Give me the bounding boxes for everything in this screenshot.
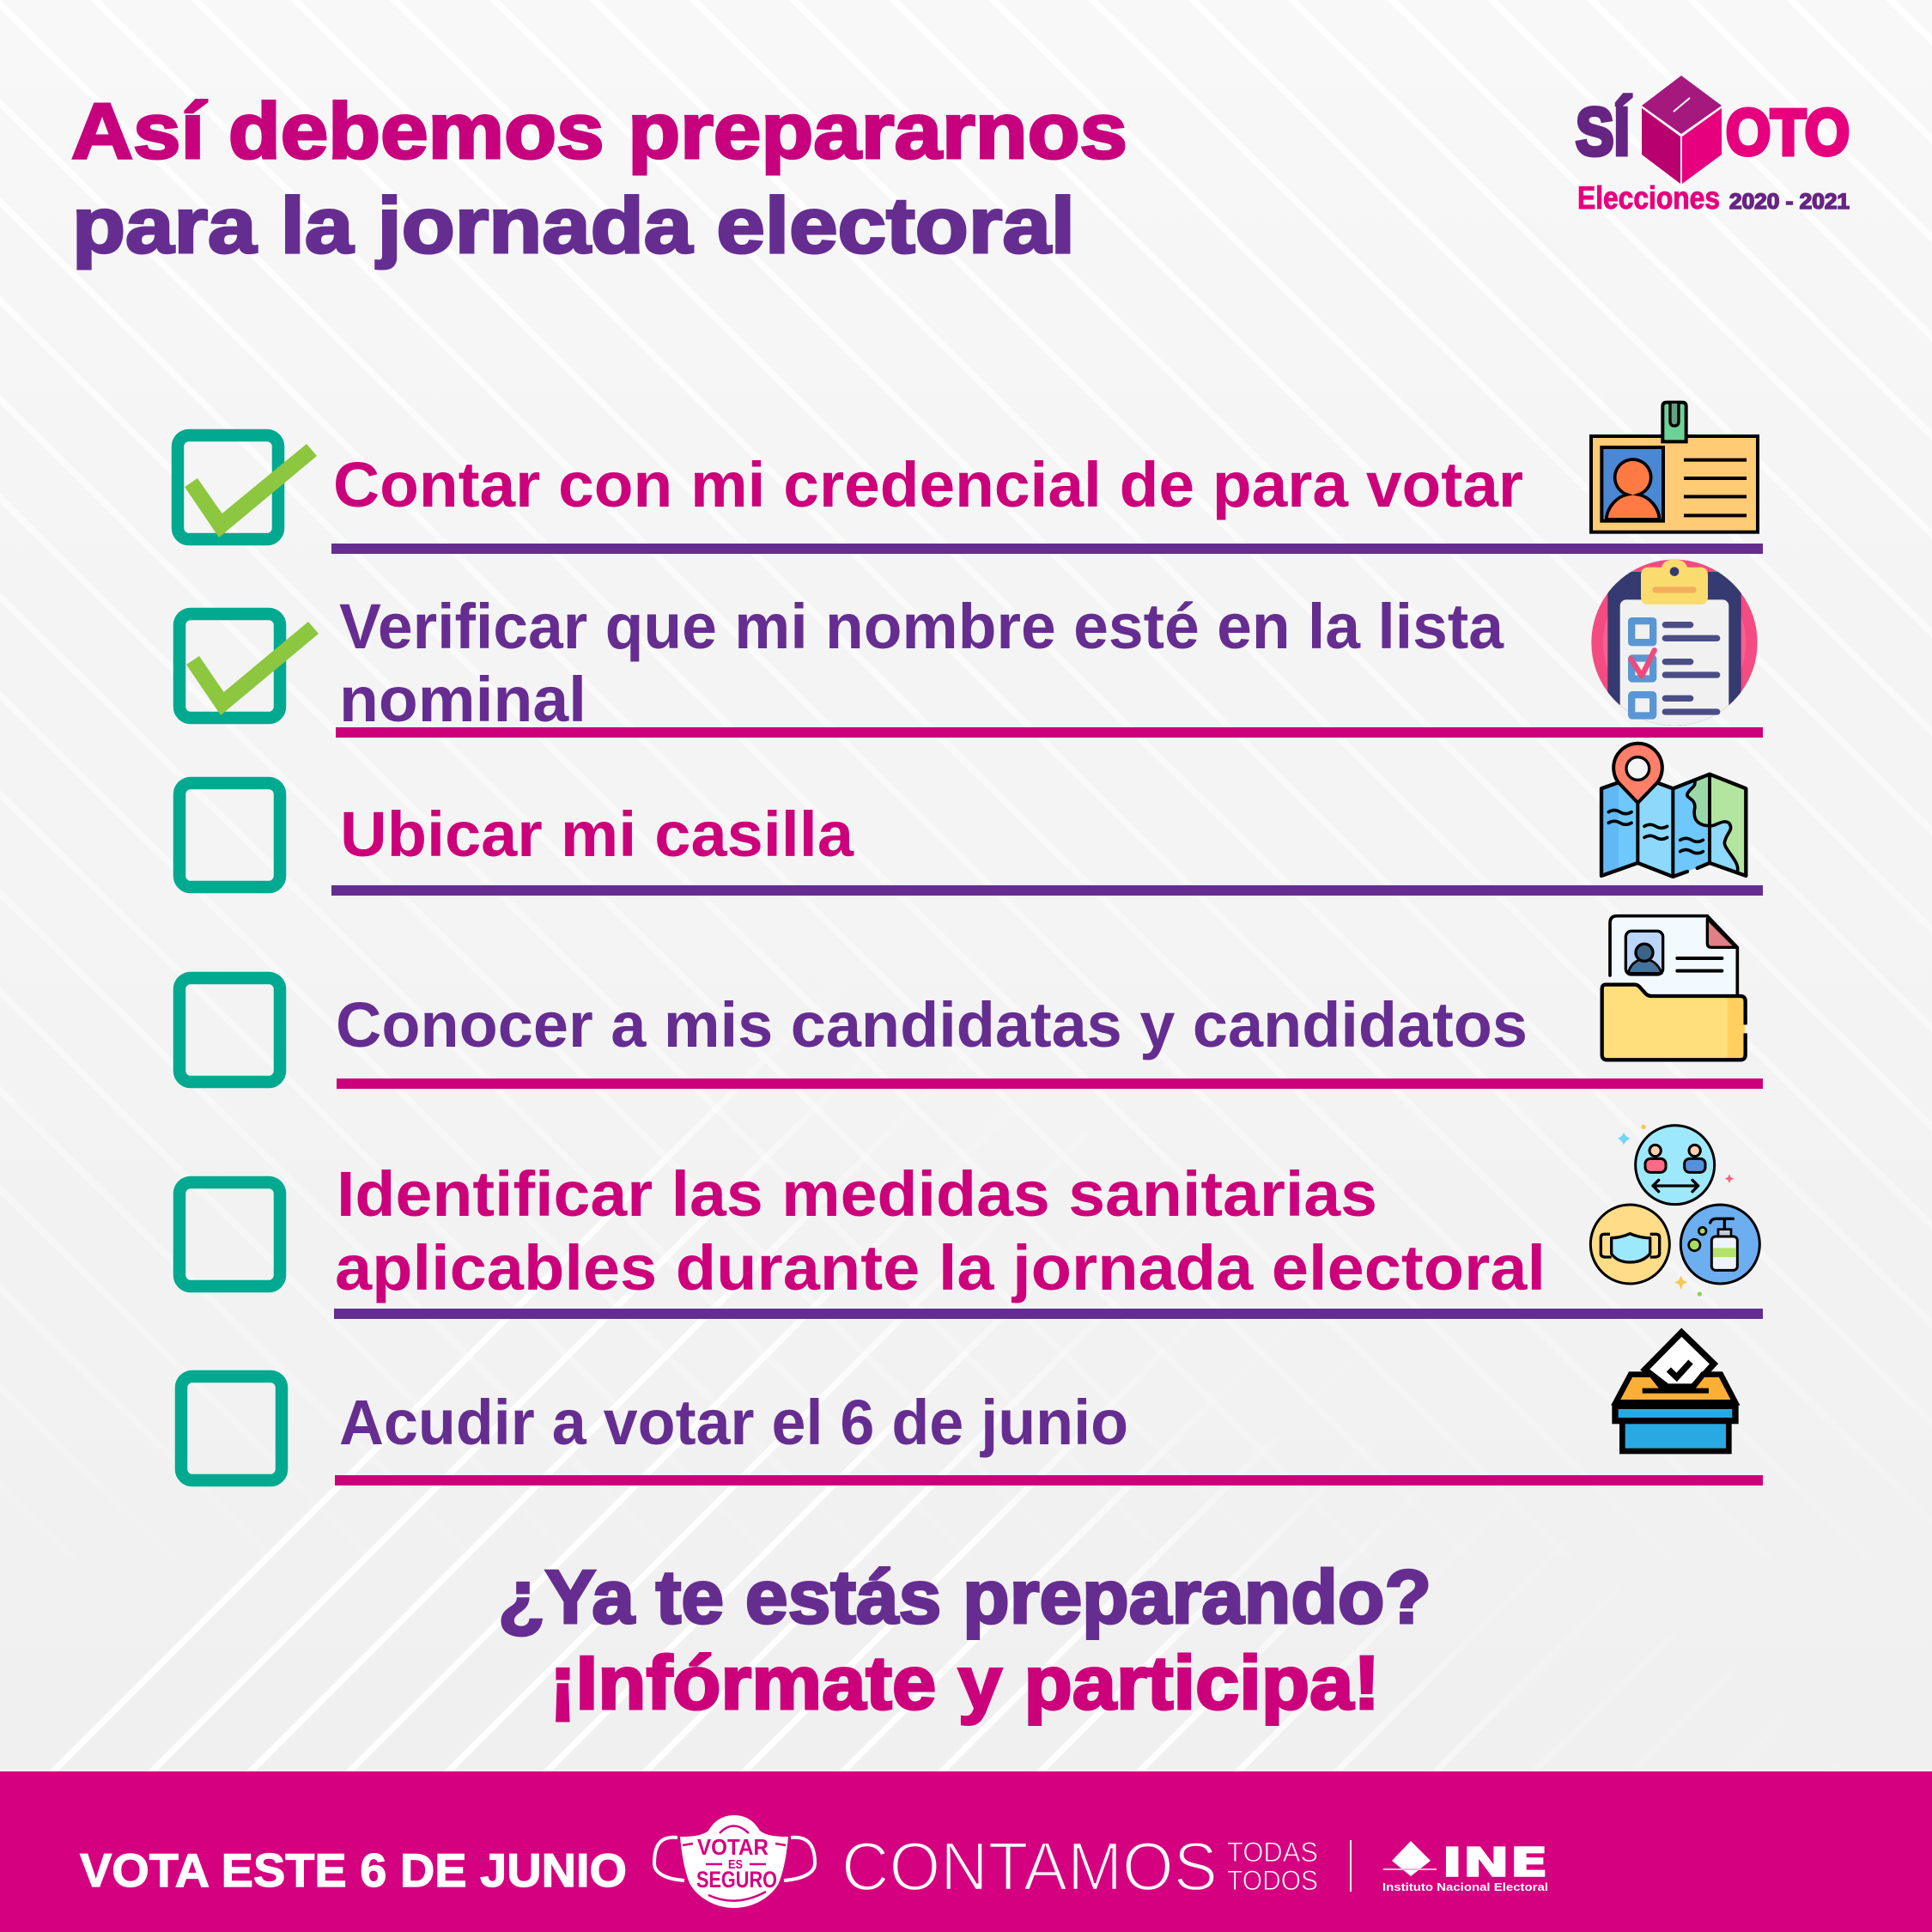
checklist item 3 — [179, 783, 1763, 896]
icon: clipboard — [1591, 560, 1758, 732]
icon: face mask Votar es seguro: SEGURO — [696, 1867, 777, 1893]
checklist item 2 — [179, 591, 1763, 738]
icon: map with location pin — [1601, 744, 1746, 877]
checklist item 5 — [179, 1158, 1763, 1319]
checklist item 2: nominal — [339, 664, 586, 735]
checklist item 5: aplicables durante la jornada electoral — [335, 1232, 1546, 1303]
checklist item 5: Identificar las medidas sanitarias — [337, 1158, 1377, 1230]
title: Así debemos prepararnos — [71, 88, 1127, 175]
INE logo: Instituto Nacional Electoral — [1382, 1880, 1548, 1893]
icon: ballot box — [1615, 1333, 1735, 1451]
logo: Sí Voto Elecciones 2020-2021 — [1576, 76, 1850, 216]
icon: folder with candidate file — [1602, 916, 1746, 1060]
footer band — [0, 1771, 1932, 1932]
INE logo — [1382, 1839, 1548, 1893]
closing message: ¡Infórmate y participa! — [550, 1640, 1380, 1725]
checklist item 3: Ubicar mi casilla — [340, 799, 854, 870]
footer slogan: VOTA ESTE 6 DE JUNIO — [80, 1844, 627, 1897]
checklist item 1: Contar con mi credencial de para votar — [333, 449, 1523, 520]
Contamos todas todos: CONTAMOS — [841, 1828, 1218, 1905]
title — [71, 88, 1127, 270]
checklist item 4: Conocer a mis candidatas y candidatos — [336, 989, 1528, 1060]
logo: Sí Voto Elecciones 2020-2021: Elecciones — [1577, 180, 1720, 216]
logo: Sí Voto Elecciones 2020-2021: OTO — [1726, 96, 1850, 168]
Contamos todas todos: TODAS — [1227, 1837, 1318, 1868]
closing message: ¿Ya te estás preparando? — [498, 1554, 1431, 1639]
INE logo: INE — [1442, 1839, 1548, 1886]
icon: sanitary measures — [1590, 1125, 1759, 1297]
closing message — [498, 1554, 1431, 1725]
checklist item 1 — [178, 435, 1763, 554]
title: para la jornada electoral — [72, 182, 1075, 270]
checklist item 6 — [181, 1376, 1763, 1485]
Contamos todas todos: TODOS — [1227, 1865, 1318, 1896]
logo: Sí Voto Elecciones 2020-2021: SÍ — [1576, 94, 1631, 169]
icon: voter credential — [1591, 403, 1758, 532]
icon: face mask Votar es seguro: VOTAR — [697, 1834, 769, 1860]
checklist item 6: Acudir a votar el 6 de junio — [339, 1387, 1128, 1458]
icon: face mask Votar es seguro — [654, 1815, 815, 1908]
icon: face mask Votar es seguro: ES — [728, 1857, 743, 1872]
checklist item 2: Verificar que mi nombre esté en la lista — [339, 591, 1504, 662]
logo: Sí Voto Elecciones 2020-2021: 2020 - 2021 — [1729, 190, 1850, 214]
checklist item 4 — [179, 978, 1763, 1089]
